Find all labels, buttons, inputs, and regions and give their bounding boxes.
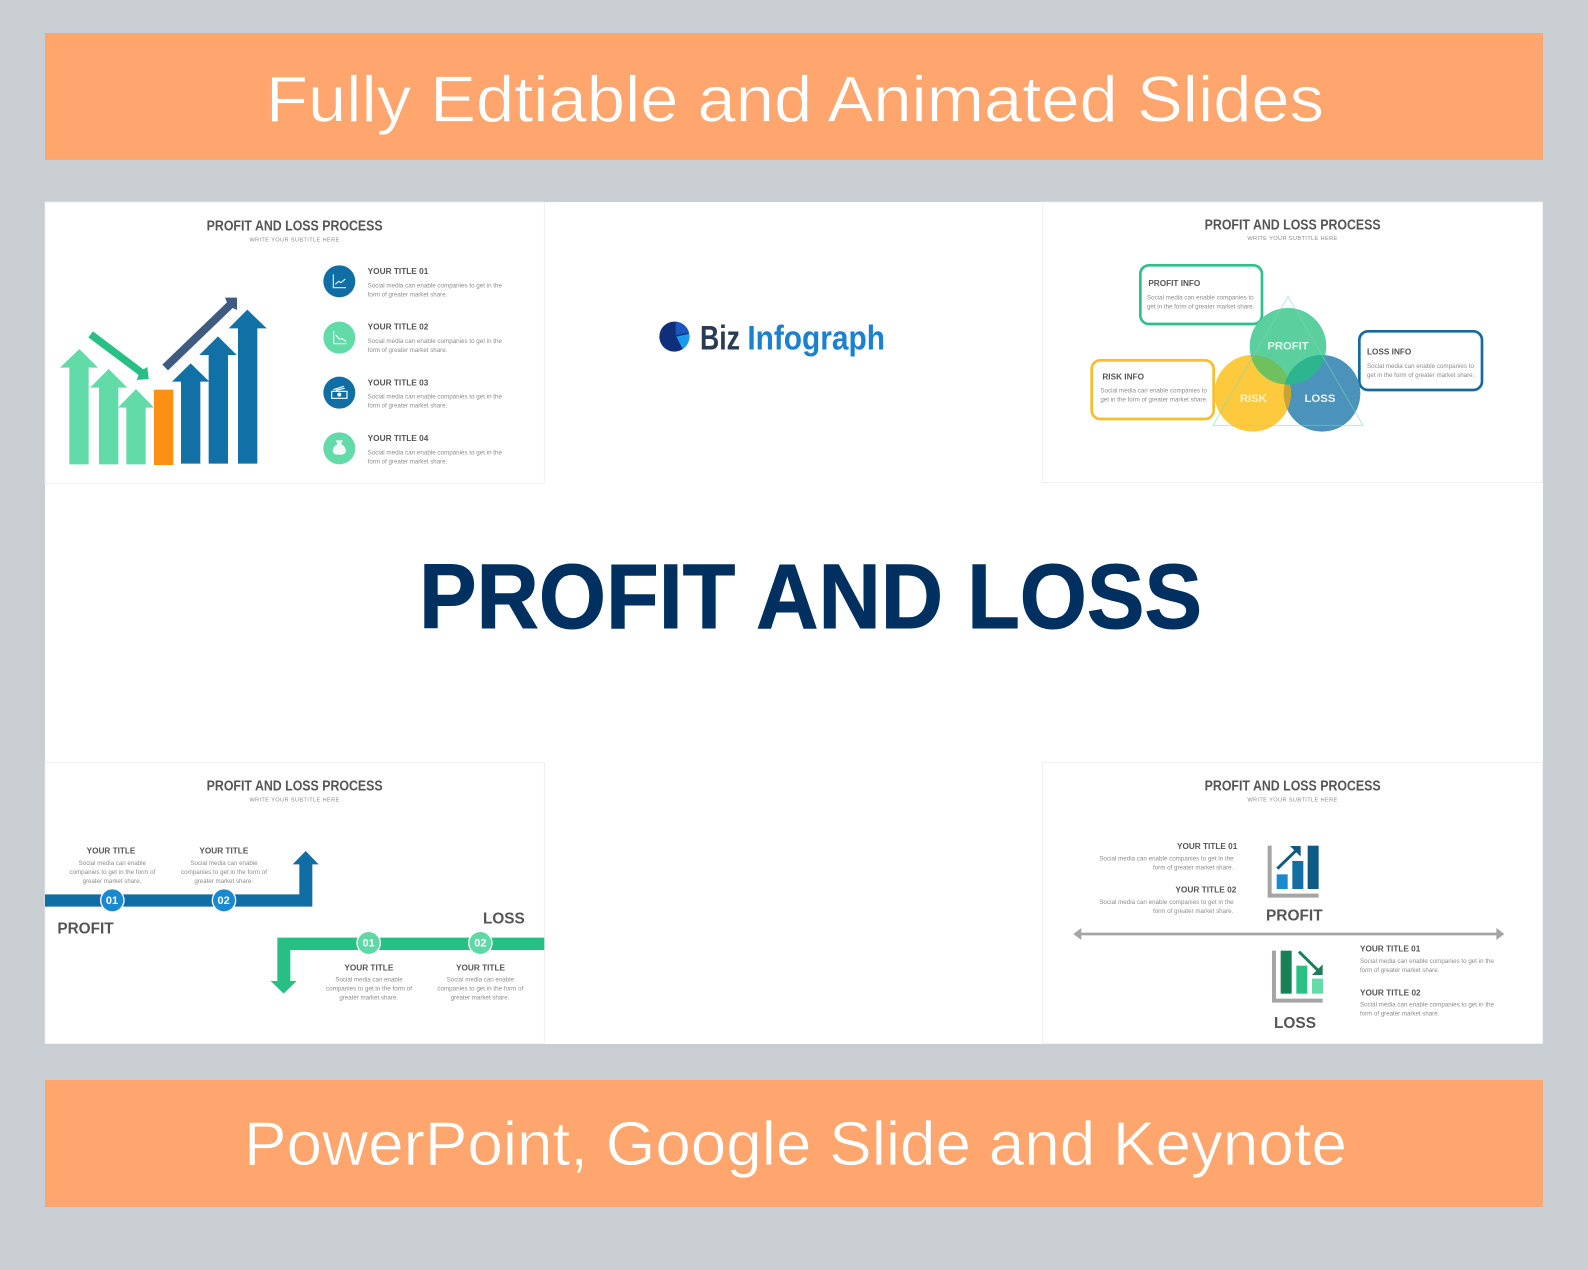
profit step 2: companies to get in the form of xyxy=(181,869,267,876)
icon: pie xyxy=(659,322,690,352)
loss info box: LOSS INFO xyxy=(1367,347,1411,356)
loss step 1: companies to get in the form of xyxy=(326,986,412,993)
loss step 2: YOUR TITLE xyxy=(456,963,506,972)
profit text 2: form of greater market share. xyxy=(1153,908,1234,915)
loss text 1 xyxy=(1360,945,1494,974)
loss text 1: YOUR TITLE 01 xyxy=(1360,945,1421,954)
double arrow divider xyxy=(1073,928,1504,940)
profit step 2: YOUR TITLE xyxy=(199,847,249,856)
risk info box: get in the form of greater market share. xyxy=(1100,396,1208,403)
profit label: PROFIT xyxy=(57,921,114,938)
profit info box xyxy=(1140,265,1262,324)
green rising arrows xyxy=(60,349,154,464)
risk info box: Social media can enable companies to xyxy=(1100,387,1207,394)
profit step 1: 01 xyxy=(106,895,118,907)
loss info box: Social media can enable companies to xyxy=(1367,363,1474,370)
item 2 xyxy=(323,322,502,354)
blue rising arrows xyxy=(172,310,267,464)
profit text 2: YOUR TITLE 02 xyxy=(1175,886,1237,895)
profit label: PROFIT xyxy=(1266,908,1323,925)
loss text 1: Social media can enable companies to get in the xyxy=(1360,958,1494,965)
loss step 2: greater market share. xyxy=(451,995,510,1002)
slide subtitle: WRITE YOUR SUBTITLE HERE xyxy=(1247,236,1338,242)
loss step 1: YOUR TITLE xyxy=(344,963,394,972)
top banner: Fully Edtiable and Animated Slides xyxy=(266,62,1324,136)
bottom banner xyxy=(45,1080,1543,1207)
wordmark: Infograph xyxy=(747,319,885,357)
loss info box xyxy=(1359,331,1482,390)
orange bar xyxy=(154,390,173,465)
profit text 2: Social media can enable companies to get in the xyxy=(1099,899,1234,906)
risk info box: RISK INFO xyxy=(1102,373,1144,382)
loss step 2: Social media can enable xyxy=(447,977,514,984)
item 3: form of greater market share. xyxy=(368,403,448,410)
item 4: YOUR TITLE 04 xyxy=(368,434,429,443)
item 3: YOUR TITLE 03 xyxy=(368,378,429,387)
item 2: YOUR TITLE 02 xyxy=(368,323,429,332)
slide subtitle: WRITE YOUR SUBTITLE HERE xyxy=(1247,797,1338,803)
profit info box: Social media can enable companies to xyxy=(1147,294,1254,301)
loss text 2: Social media can enable companies to get in the xyxy=(1360,1001,1494,1008)
loss step 2 xyxy=(437,931,524,1002)
wordmark xyxy=(700,319,885,357)
slide heading: PROFIT AND LOSS PROCESS xyxy=(207,779,383,795)
main title: PROFIT AND LOSS xyxy=(419,546,1202,648)
profit step 1: Social media can enable xyxy=(79,860,146,867)
green down trend arrow xyxy=(88,331,149,380)
profit step 2: Social media can enable xyxy=(190,860,258,867)
item 1: Social media can enable companies to get in the xyxy=(368,282,502,289)
item 3 xyxy=(323,377,502,410)
item 2: Social media can enable companies to get in the xyxy=(368,338,502,345)
icon: profit chart xyxy=(1268,846,1319,898)
profit text 1: YOUR TITLE 01 xyxy=(1177,842,1238,851)
white content area xyxy=(45,202,1543,1044)
loss step 1: greater market share. xyxy=(339,995,398,1002)
loss step 2: 02 xyxy=(474,938,486,950)
profit step 1: YOUR TITLE xyxy=(87,847,136,856)
profit step 2 xyxy=(181,847,267,913)
top banner xyxy=(45,33,1543,160)
item 2: form of greater market share. xyxy=(368,347,448,354)
venn diagram: RISK xyxy=(1240,393,1267,405)
profit text 1: Social media can enable companies to get in the xyxy=(1099,855,1234,862)
profit text 1: form of greater market share. xyxy=(1153,864,1234,871)
loss text 2: form of greater market share. xyxy=(1360,1010,1440,1017)
venn diagram: PROFIT xyxy=(1267,340,1309,352)
loss step 1: Social media can enable xyxy=(335,977,403,984)
slide heading: PROFIT AND LOSS PROCESS xyxy=(207,218,383,234)
loss step 2: companies to get in the form of xyxy=(437,986,524,993)
item 1: YOUR TITLE 01 xyxy=(368,267,429,276)
profit text 2 xyxy=(1099,886,1237,915)
venn diagram xyxy=(1213,297,1363,432)
loss text 1: form of greater market share. xyxy=(1360,967,1440,974)
loss label: LOSS xyxy=(1274,1015,1316,1032)
profit step 2: greater market share. xyxy=(194,878,253,885)
logo xyxy=(659,319,885,357)
item 1 xyxy=(323,265,502,298)
loss step 1: 01 xyxy=(363,938,375,950)
profit step 2: 02 xyxy=(218,895,230,907)
item 1: form of greater market share. xyxy=(368,291,448,298)
slide heading: PROFIT AND LOSS PROCESS xyxy=(1205,217,1381,233)
slide subtitle: WRITE YOUR SUBTITLE HERE xyxy=(249,797,340,803)
panel: venn slide xyxy=(1043,202,1543,483)
risk info box xyxy=(1092,360,1214,419)
profit step 1: companies to get in the form of xyxy=(69,869,156,876)
loss label: LOSS xyxy=(483,910,525,927)
profit info box: get in the form of greater market share. xyxy=(1147,303,1255,310)
loss info box: get in the form of greater market share. xyxy=(1367,372,1475,379)
profit info box: PROFIT INFO xyxy=(1148,279,1200,288)
item 4 xyxy=(323,432,502,465)
venn diagram: LOSS xyxy=(1304,393,1335,405)
slide subtitle: WRITE YOUR SUBTITLE HERE xyxy=(249,237,340,243)
icon: loss chart xyxy=(1272,951,1323,1003)
loss step 1 xyxy=(326,931,412,1002)
dark up trend arrow xyxy=(162,298,237,370)
profit text 1 xyxy=(1099,842,1238,871)
item 3: Social media can enable companies to get in the xyxy=(368,394,502,401)
panel: split chart slide xyxy=(1043,762,1543,1043)
profit arrow xyxy=(45,851,319,907)
item 4: form of greater market share. xyxy=(368,458,448,465)
panel: bar arrows slide xyxy=(45,202,544,483)
item 4: Social media can enable companies to get in the xyxy=(368,449,502,456)
loss arrow xyxy=(271,938,544,994)
bottom banner: PowerPoint, Google Slide and Keynote xyxy=(244,1110,1347,1179)
loss text 2: YOUR TITLE 02 xyxy=(1360,988,1421,997)
profit step 1: greater market share. xyxy=(83,878,142,885)
panel: timeline slide xyxy=(45,762,544,1043)
profit step 1 xyxy=(69,847,156,913)
slide heading: PROFIT AND LOSS PROCESS xyxy=(1205,779,1381,795)
wordmark: Biz xyxy=(700,319,740,357)
loss text 2 xyxy=(1360,988,1494,1017)
